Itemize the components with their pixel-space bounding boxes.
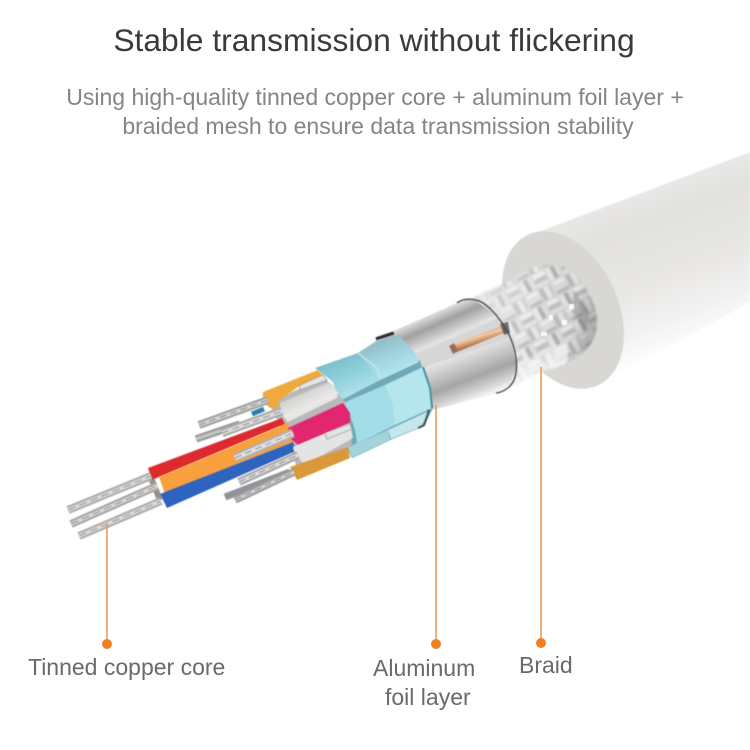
label: tinned copper core: Tinned copper core bbox=[28, 654, 225, 680]
sleeve: lowest pale bbox=[348, 410, 429, 458]
jacket end face bbox=[478, 212, 648, 408]
strip: upper foil sliver bbox=[300, 375, 327, 390]
insulated core: lower white bbox=[293, 423, 353, 465]
subtitle: braided mesh to ensure data transmission stability bbox=[122, 113, 634, 139]
insulated core: lower orange bbox=[290, 447, 350, 480]
label: braid: Braid bbox=[519, 652, 573, 678]
leader: braid bbox=[536, 367, 546, 648]
braid highlights bbox=[541, 304, 574, 336]
strip: lower foil sliver bbox=[325, 424, 352, 439]
sleeve: lower blue bbox=[343, 367, 432, 444]
copper drain wire bbox=[449, 322, 510, 354]
label: aluminum foil layer: foil layer bbox=[385, 684, 471, 710]
title: Stable transmission without flickering bbox=[113, 22, 635, 58]
outer white jacket bbox=[478, 152, 750, 408]
insulated core: upper white bbox=[280, 382, 338, 422]
insulated core: red bbox=[148, 418, 285, 480]
insulated core backing bbox=[268, 378, 352, 478]
subtitle: Using high-quality tinned copper core + aluminum foil layer + bbox=[66, 84, 684, 110]
insulated core: blue bbox=[160, 442, 296, 508]
braid bbox=[472, 265, 597, 392]
tinned copper wires bbox=[68, 400, 298, 536]
leader: tinned copper core bbox=[102, 524, 112, 649]
insulated core: orange bbox=[159, 423, 293, 494]
sleeve backing bbox=[338, 360, 433, 458]
subtitle bbox=[66, 84, 684, 139]
insulated core: pink bbox=[288, 403, 350, 445]
insulated core: upper orange bbox=[263, 370, 323, 408]
aluminum foil layer bbox=[376, 298, 517, 410]
sleeve: upper teal bbox=[315, 335, 419, 402]
label: aluminum foil layer: Aluminum bbox=[373, 655, 475, 681]
leader: aluminum foil layer bbox=[431, 405, 441, 649]
label: aluminum foil layer bbox=[373, 655, 475, 710]
